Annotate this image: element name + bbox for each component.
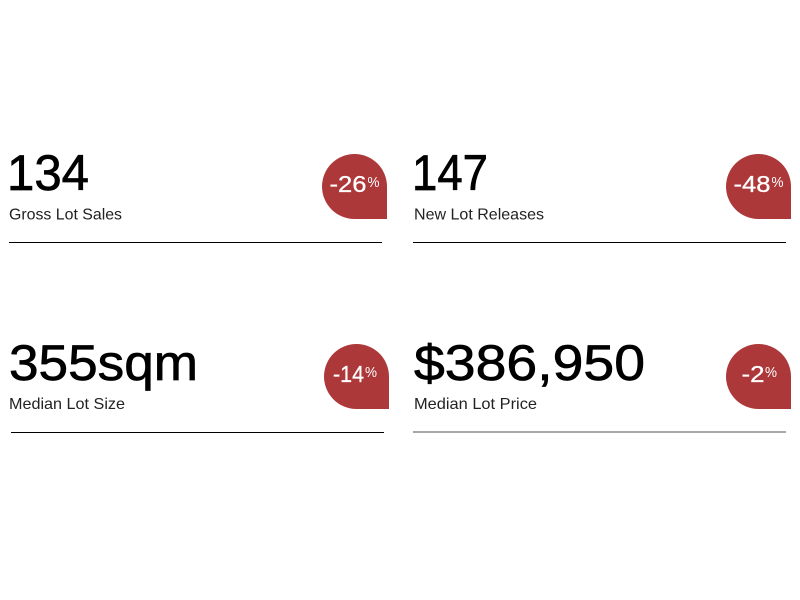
value: 355sqm: 355sqm xyxy=(9,335,198,391)
value: $386,950: $386,950 xyxy=(414,335,645,391)
badge: -14% xyxy=(324,344,389,409)
panel: median lot size xyxy=(9,335,389,433)
badge: -2%: -2 xyxy=(742,361,764,387)
panel: median lot price xyxy=(413,335,791,433)
badge: -26%: -26 xyxy=(330,171,366,197)
value: 147: 147 xyxy=(412,145,488,201)
badge: -26% xyxy=(322,154,387,219)
badge: -48% xyxy=(726,154,791,219)
label: gross lot sales: Gross Lot Sales xyxy=(9,206,122,224)
badge: -14%: -14 xyxy=(333,361,364,387)
badge: -14%: % xyxy=(365,364,377,381)
value: 134: 134 xyxy=(7,145,89,201)
badge: -2%: % xyxy=(765,364,777,381)
label: new lot releases: New Lot Releases xyxy=(414,206,544,224)
label: median lot size: Median Lot Size xyxy=(9,396,125,413)
panel: gross lot sales xyxy=(7,145,387,243)
label: median lot price: Median Lot Price xyxy=(414,396,537,413)
badge: -48%: -48 xyxy=(734,171,770,197)
panel: new lot releases xyxy=(412,145,791,243)
badge: -26%: % xyxy=(368,174,380,191)
badge: -2% xyxy=(726,344,791,409)
badge: -48%: % xyxy=(772,174,784,191)
